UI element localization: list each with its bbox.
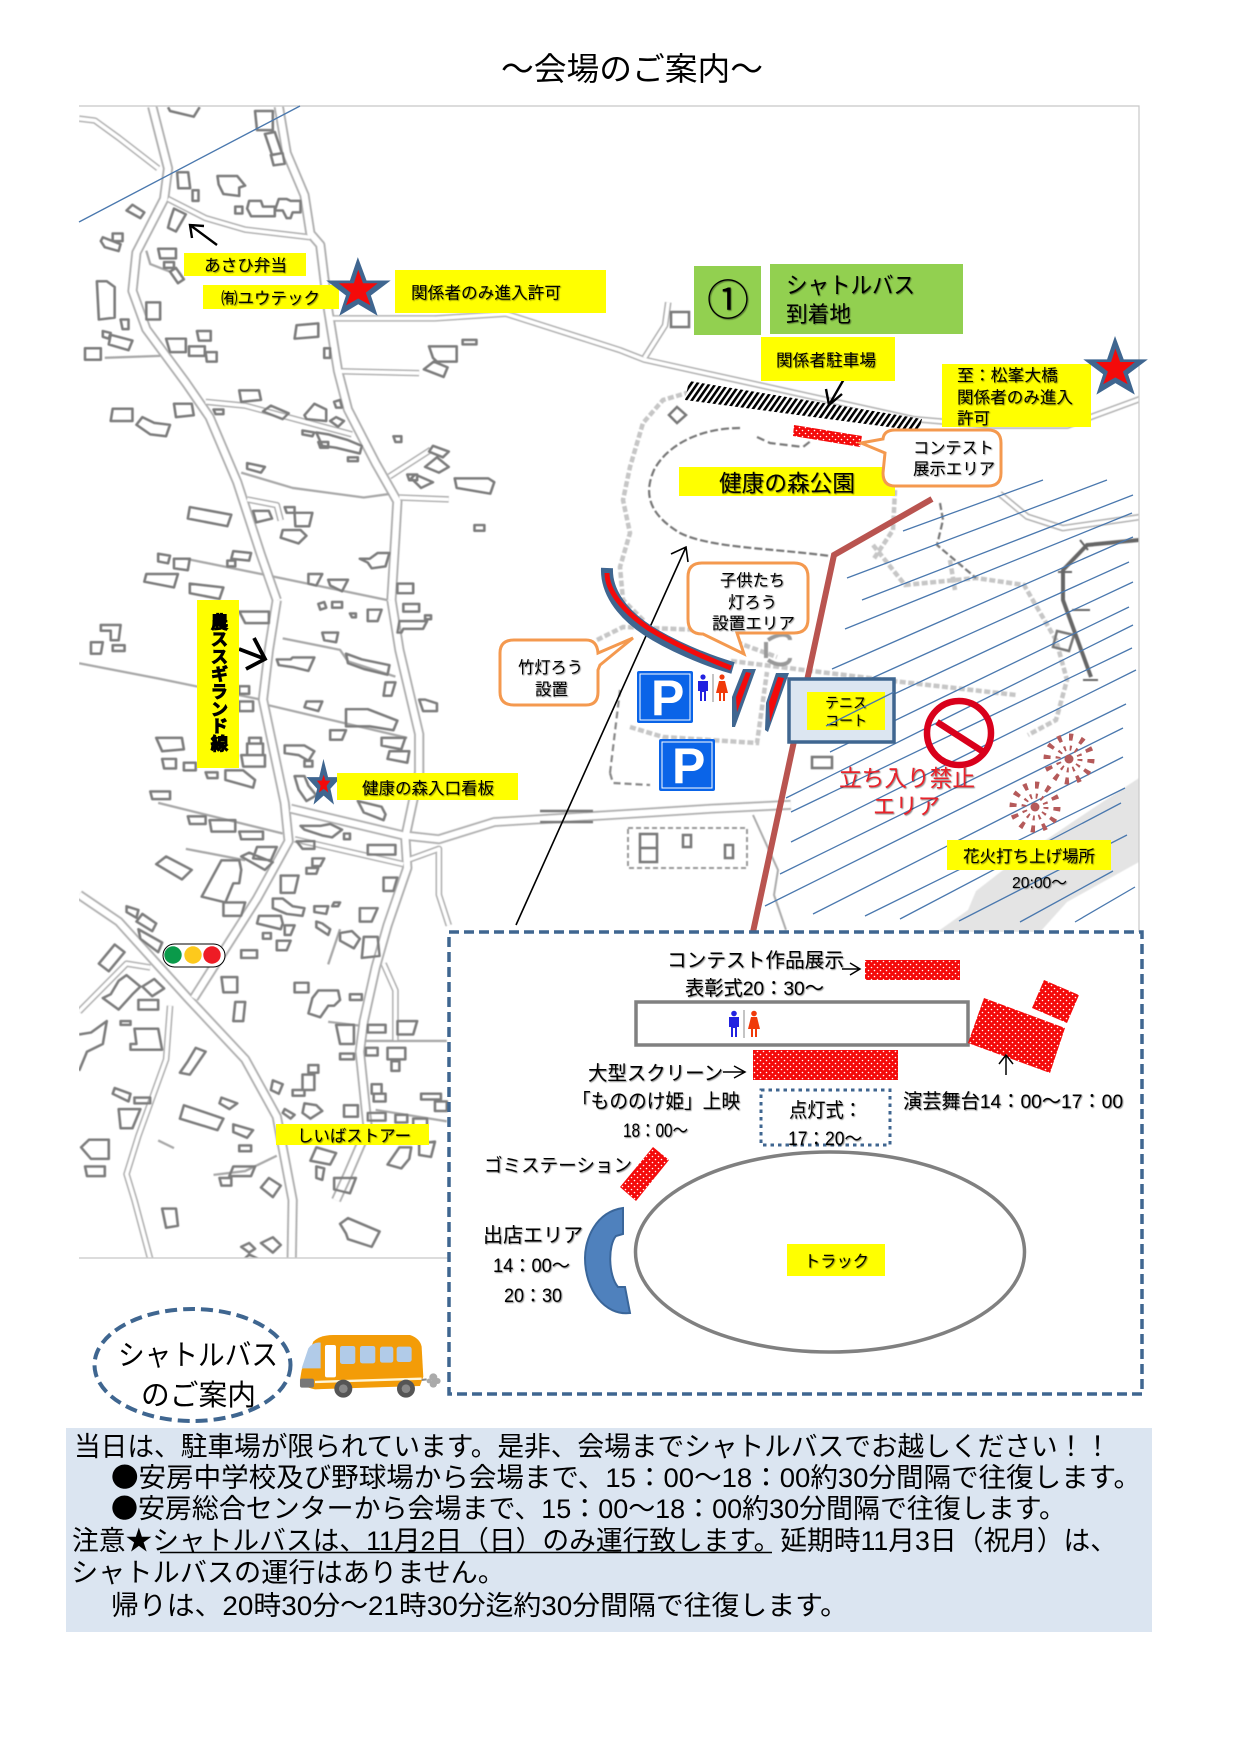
star marker 2	[1083, 336, 1148, 395]
park and right side of base map	[540, 312, 1139, 930]
arrow to asahi bento	[190, 225, 217, 245]
yellow label: to matsumine bridge: 関係者のみ進入	[957, 388, 1073, 407]
lighting ceremony box	[761, 1090, 890, 1150]
track ellipse	[636, 1152, 1024, 1352]
callout: children lanterns: 灯ろう	[728, 593, 777, 612]
contest exhibit red bar	[793, 425, 862, 447]
tennis court	[789, 679, 894, 742]
bamboo lantern barrier, curved	[607, 568, 733, 668]
line 3: ●安房総合センターから会場まで、15：00～18：00約30分間隔で往復します。	[111, 1487, 1066, 1526]
traffic signal icon	[163, 944, 225, 967]
yellow label: staff parking: 関係者駐車場	[776, 351, 876, 370]
green shuttle arrival box: シャトルバス	[786, 272, 915, 298]
yellow label: utec: ㈲ユウテック	[221, 289, 320, 308]
green number box: ①	[707, 277, 749, 324]
contest exhibit label	[667, 950, 844, 1000]
yellow label: park name: 健康の森公園	[719, 470, 855, 496]
green shuttle arrival box: 到着地	[786, 302, 851, 327]
callout: children lanterns: 設置エリア	[712, 614, 795, 633]
line 4: 注意★シャトルバスは、11月2日（日）のみ運行致します。延期時11月3日（祝月）は、	[72, 1526, 1117, 1556]
restroom icon	[698, 674, 728, 702]
big screen label: 大型スクリーン	[588, 1063, 723, 1085]
arrow to big screen	[723, 1066, 745, 1078]
bold road arrow	[239, 638, 265, 669]
diagonal blue boundary line	[79, 106, 300, 222]
callout: bamboo lanterns: 設置	[535, 680, 568, 699]
big screen label: 18：00～	[623, 1121, 688, 1142]
yellow label: park entrance sign: 健康の森入口看板	[362, 779, 494, 798]
tennis court: コート	[825, 714, 867, 730]
yellow label: asahi: あさひ弁当	[204, 256, 287, 275]
no-entry text: 立ち入り禁止	[839, 765, 975, 791]
yellow label: track: トラック	[804, 1252, 869, 1271]
yellow label: to matsumine bridge: 至：松峯大橋	[957, 366, 1058, 385]
star marker 1	[326, 257, 391, 316]
callout: contest exhibit area	[861, 430, 1001, 486]
shuttle bus heading oval: のご案内	[141, 1379, 256, 1412]
callout: contest exhibit area: 展示エリア	[913, 460, 995, 478]
arrow to parking	[826, 379, 844, 405]
parking sign 2	[659, 738, 715, 794]
restroom icon in building	[729, 1010, 760, 1038]
no-entry text	[839, 765, 975, 819]
shuttle bus information panel	[66, 1428, 1152, 1632]
map border	[79, 106, 1139, 1258]
stall area label: 14：00～	[493, 1256, 570, 1277]
yellow label: park name	[679, 467, 895, 496]
lighting ceremony box: 点灯式：	[789, 1100, 862, 1122]
vertical yellow road label: 農ススギランド線	[209, 613, 229, 753]
green shuttle arrival box	[770, 264, 963, 334]
line 6: 帰りは、20時30分～21時30分迄約30分間隔で往復します。	[111, 1591, 848, 1621]
map panel	[79, 106, 1148, 1327]
grey building	[636, 1002, 968, 1045]
stall area label	[483, 1225, 583, 1307]
yellow label: to matsumine bridge	[942, 364, 1091, 428]
stall area label: 出店エリア	[483, 1225, 583, 1247]
callout: bamboo lanterns	[500, 638, 633, 705]
bamboo lantern barrier, short segments	[732, 669, 789, 732]
parking hatched strip	[685, 381, 922, 431]
long arrow from inset to park	[516, 547, 688, 925]
underline for line 4	[160, 1552, 772, 1554]
no-entry sign	[927, 701, 991, 765]
base map: roads and houses	[79, 106, 1143, 1327]
inset panel: venue detail	[449, 932, 1142, 1394]
shuttle bus heading oval: シャトルバス	[118, 1340, 278, 1372]
icon: shuttle bus	[300, 1335, 441, 1398]
big screen label	[572, 1063, 740, 1142]
contest exhibit red block	[865, 960, 960, 980]
garbage station red block	[620, 1147, 669, 1201]
yellow label: shiiba store	[276, 1124, 429, 1146]
fireworks time: 20:00～	[1012, 875, 1067, 892]
shuttle bus heading oval	[94, 1309, 290, 1421]
contest exhibit label: コンテスト作品展示	[667, 950, 844, 972]
callout: children lanterns	[688, 563, 808, 654]
yellow label: to matsumine bridge: 許可	[957, 409, 990, 428]
yellow label: park entrance sign	[337, 773, 518, 800]
yellow label: track	[787, 1244, 885, 1276]
title: ～会場のご案内～	[501, 51, 763, 87]
no-entry hatched area	[765, 480, 1136, 922]
big screen label: 「もののけ姫」上映	[572, 1091, 740, 1113]
callout: bamboo lanterns: 竹灯ろう	[518, 658, 583, 677]
arrow to stage	[999, 1055, 1013, 1075]
line 2: ●安房中学校及び野球場から会場まで、15：00～18：00約30分間隔で往復します。	[111, 1456, 1141, 1495]
yellow label: shiiba store: しいばストアー	[297, 1126, 411, 1146]
no-entry text: エリア	[873, 793, 940, 819]
arrow to contest exhibit	[842, 963, 860, 975]
star marker: park entrance sign	[307, 759, 341, 805]
big screen red block	[753, 1050, 898, 1080]
tennis court: テニス	[825, 696, 867, 712]
parking sign 2: P	[672, 738, 705, 794]
stall area label: 20：30	[504, 1286, 562, 1307]
callout: children lanterns: 子供たち	[720, 571, 785, 590]
parking sign 1	[637, 670, 693, 726]
line 1: 当日は、駐車場が限られています。是非、会場までシャトルバスでお越しください！！	[74, 1432, 1111, 1462]
yellow label: staff parking	[761, 337, 895, 381]
contest exhibit label: 表彰式20：30～	[685, 978, 824, 1000]
vertical yellow road label	[197, 600, 239, 768]
yellow label: fireworks launch site	[947, 840, 1111, 870]
no-entry boundary red line	[753, 499, 932, 932]
fireworks icons	[1013, 737, 1091, 829]
yellow label: utec	[203, 285, 339, 309]
performance stage red blocks	[968, 980, 1079, 1073]
green number box	[694, 266, 761, 335]
yellow label: asahi	[184, 253, 306, 276]
line 5: シャトルバスの運行はありません。	[71, 1558, 505, 1588]
parking sign 1: P	[651, 670, 684, 726]
yellow label: authorized entry	[395, 270, 606, 313]
callout: contest exhibit area: コンテスト	[913, 440, 994, 458]
performance stage label: 演芸舞台14：00～17：00	[903, 1091, 1123, 1113]
stall area crescent	[585, 1208, 630, 1313]
lighting ceremony box: 17：20～	[788, 1129, 862, 1150]
yellow label: fireworks launch site: 花火打ち上げ場所	[963, 847, 1095, 866]
yellow label: authorized entry: 関係者のみ進入許可	[411, 284, 561, 302]
garbage station label: ゴミステーション	[484, 1155, 632, 1176]
